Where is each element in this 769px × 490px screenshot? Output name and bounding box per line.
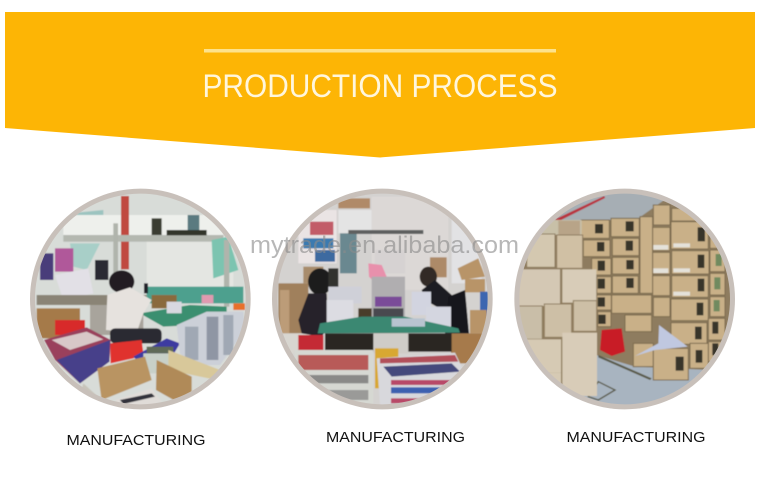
caption: manufacturing 1: MANUFACTURING xyxy=(66,432,206,449)
caption: manufacturing 2: MANUFACTURING xyxy=(326,429,465,446)
title: PRODUCTION PROCESS xyxy=(202,68,558,104)
photo circle 1: sewing workshop xyxy=(30,188,251,410)
caption: manufacturing 3: MANUFACTURING xyxy=(566,429,706,446)
banner xyxy=(5,12,755,158)
banner background arrow xyxy=(5,12,755,158)
watermark: mytrade.en.alibaba.com xyxy=(250,232,519,259)
banner rule xyxy=(204,49,556,52)
photo circle 3: carton warehouse xyxy=(514,188,735,410)
photo circle 2: assembly table xyxy=(272,188,493,410)
